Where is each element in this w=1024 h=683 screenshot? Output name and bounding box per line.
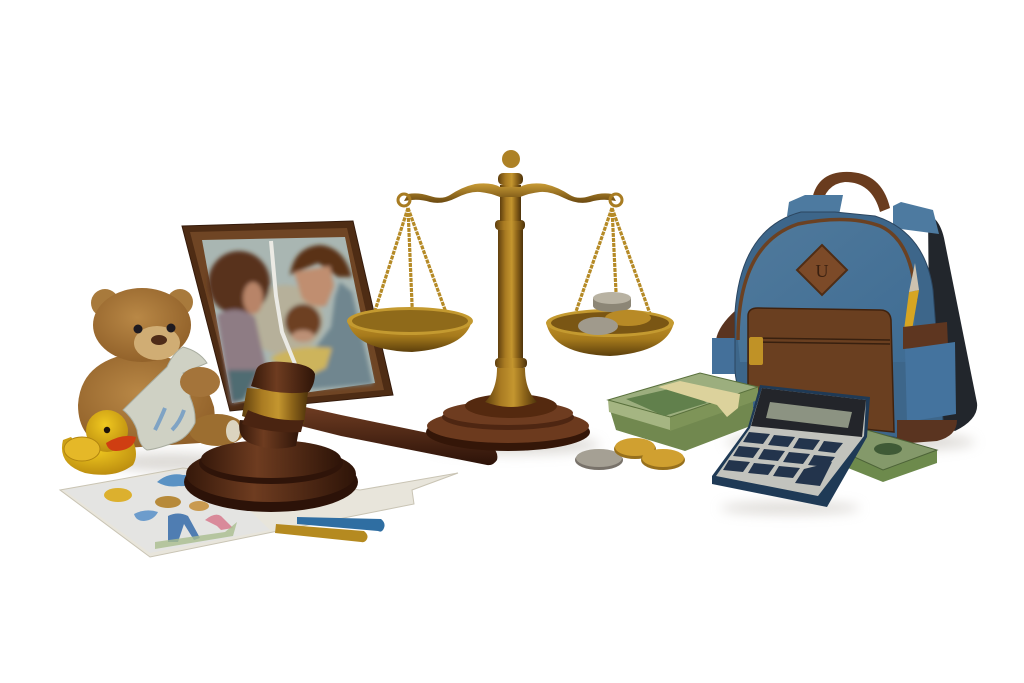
zipper pull xyxy=(749,337,763,365)
backpack xyxy=(712,172,977,444)
upper cash stack xyxy=(608,400,670,430)
loose coins xyxy=(575,438,685,470)
lower cash stack xyxy=(610,398,753,451)
diamond emblem xyxy=(797,245,847,295)
gavel head xyxy=(239,362,315,449)
scales base xyxy=(426,394,590,451)
gavel with sound block xyxy=(184,362,497,512)
cash stacks xyxy=(608,373,937,482)
backpack body xyxy=(735,212,943,438)
right side pocket xyxy=(897,322,957,444)
calculator display xyxy=(751,388,866,437)
paper band xyxy=(658,381,740,417)
scales post xyxy=(485,150,537,407)
blanket xyxy=(123,347,207,450)
left pan xyxy=(347,307,473,352)
carry handle xyxy=(811,172,890,212)
pencil xyxy=(904,263,919,330)
rubber duck xyxy=(62,410,136,475)
teddy bear xyxy=(78,288,245,450)
top straps xyxy=(787,195,939,234)
ground shadows xyxy=(110,432,975,514)
right cash stack xyxy=(848,430,937,482)
scales beam xyxy=(404,183,616,203)
balance scales xyxy=(347,150,674,451)
right pan with coins xyxy=(546,292,674,356)
calculator xyxy=(712,385,870,507)
scale chains left xyxy=(372,208,448,328)
picture frame with torn family photo xyxy=(182,221,393,411)
crayons xyxy=(275,517,385,542)
diamond emblem: U xyxy=(816,261,828,281)
brown front pocket xyxy=(748,308,894,432)
back strap xyxy=(918,212,977,431)
left side pocket xyxy=(712,310,736,374)
gavel handle xyxy=(301,407,497,465)
child's drawing on paper xyxy=(60,468,458,557)
scale chains right xyxy=(572,208,653,323)
calculator keys xyxy=(723,432,843,486)
